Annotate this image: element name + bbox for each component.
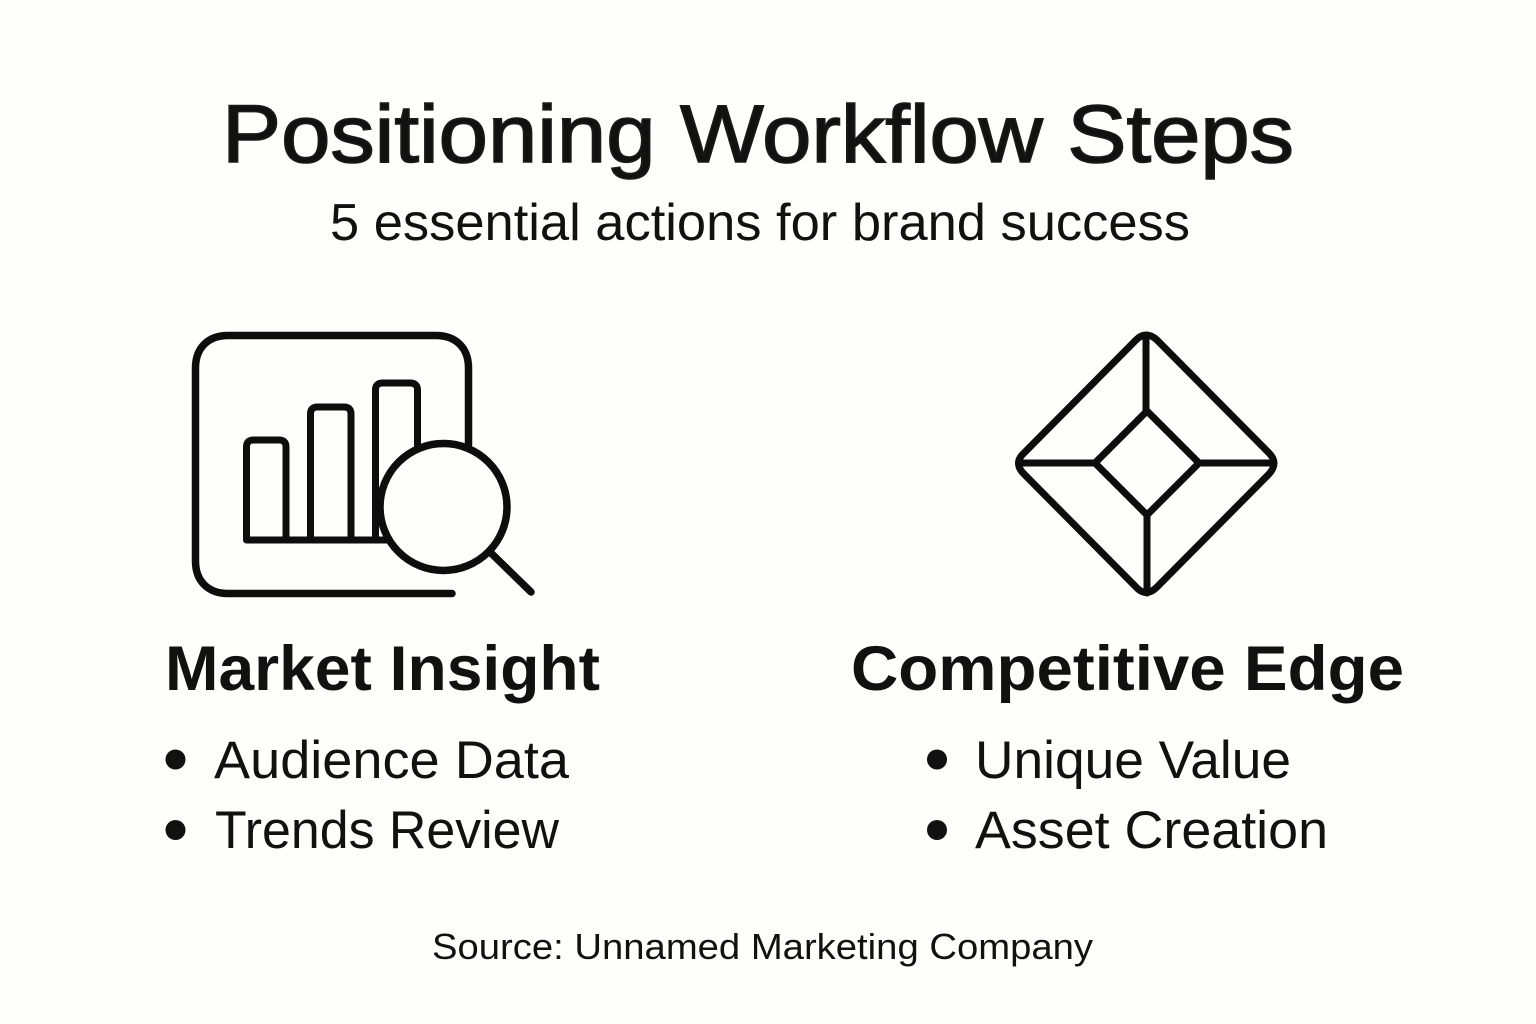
bullet list: market insight: Trends Review bbox=[215, 801, 560, 860]
title: Positioning Workflow Steps bbox=[222, 89, 1294, 180]
subtitle: 5 essential actions for brand success bbox=[330, 194, 1190, 252]
source note: Source: Unnamed Marketing Company bbox=[432, 926, 1093, 967]
icon: diamond bbox=[1018, 335, 1274, 593]
bullet list: market insight bbox=[166, 731, 570, 860]
bullet list: market insight: Audience Data bbox=[214, 731, 570, 790]
heading: market insight: Market Insight bbox=[165, 634, 600, 704]
heading: competitive edge: Competitive Edge bbox=[851, 634, 1404, 704]
panel: competitive edge bbox=[851, 634, 1404, 860]
icon: bar chart with magnifying glass bbox=[196, 336, 531, 594]
bullet list: competitive edge bbox=[927, 731, 1328, 860]
bullet list: competitive edge: Asset Creation bbox=[975, 801, 1328, 860]
bullet list: competitive edge: Unique Value bbox=[975, 731, 1291, 790]
panel: market insight bbox=[165, 634, 600, 860]
